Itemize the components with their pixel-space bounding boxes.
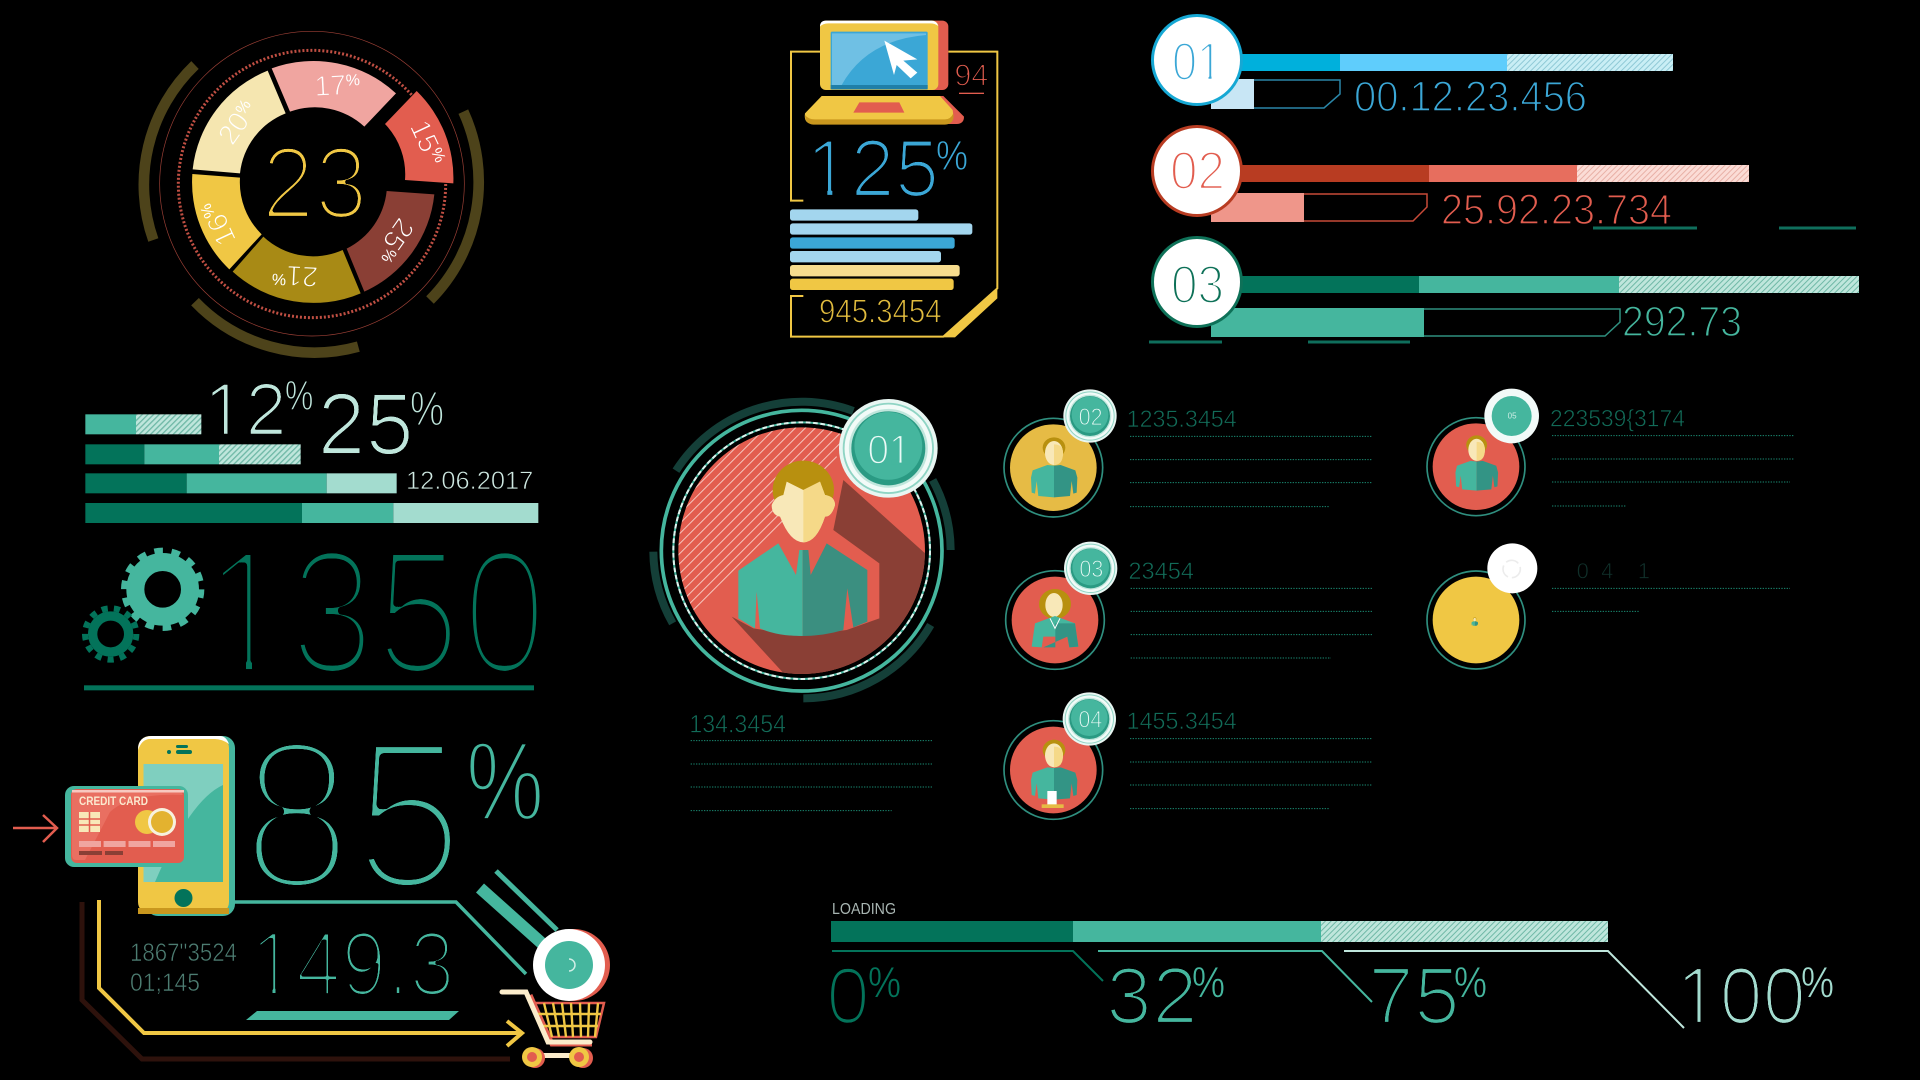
sub bar bbox=[1211, 79, 1340, 109]
panel: main profile bbox=[653, 399, 951, 811]
segment 21%: % bbox=[272, 270, 287, 287]
leader lines bbox=[832, 951, 1684, 1028]
icon: credit card bbox=[65, 786, 188, 867]
badge 01 bbox=[839, 399, 938, 498]
small values: 01;145 bbox=[130, 969, 200, 997]
value 100%: % bbox=[1801, 958, 1834, 1007]
value 12%: % bbox=[285, 372, 313, 419]
panel: profile list column one bbox=[1004, 389, 1373, 819]
value 23454: 23454 bbox=[1128, 558, 1194, 585]
segment 20% bbox=[193, 71, 286, 173]
number badge bbox=[1152, 126, 1242, 216]
segment 17% bbox=[272, 61, 396, 127]
value 0% bbox=[826, 951, 901, 1040]
number badge: 03 bbox=[1171, 255, 1224, 315]
sub bar bbox=[1211, 193, 1427, 222]
label: LOADING bbox=[832, 901, 896, 918]
panel: row 02 bbox=[1152, 126, 1749, 234]
value 85%: 85 bbox=[241, 696, 465, 933]
value: 25.92.23.734 bbox=[1441, 186, 1672, 234]
value 1235.3454: 1235.3454 bbox=[1127, 406, 1237, 433]
value 25%: % bbox=[410, 382, 444, 436]
profile 03 bbox=[1006, 542, 1117, 669]
profile 05: 05 bbox=[1508, 412, 1517, 421]
panel: laptop card bbox=[790, 21, 997, 337]
profile 03: 03 bbox=[1079, 556, 1103, 583]
stripes bbox=[678, 427, 840, 610]
decorative rings bbox=[653, 402, 951, 698]
stacked bars bbox=[85, 414, 538, 523]
icon: loading coin bbox=[533, 929, 610, 1001]
avatar disc bbox=[678, 427, 925, 674]
profile 06 bbox=[1427, 543, 1537, 669]
value 0%: % bbox=[868, 958, 901, 1007]
panel: stacked bars and gears bbox=[84, 369, 548, 711]
profile 04 bbox=[1004, 692, 1116, 819]
small values: 1867"3524 bbox=[130, 939, 237, 967]
connector lines bbox=[235, 871, 557, 974]
profile 02 bbox=[1004, 389, 1117, 517]
value 32%: % bbox=[1192, 958, 1225, 1007]
underbar bbox=[246, 1011, 459, 1020]
faded value: 0 4 1 bbox=[1577, 558, 1650, 583]
value 125%: % bbox=[936, 132, 968, 179]
card frame bbox=[791, 52, 997, 337]
icon: credit card: CREDIT CARD bbox=[79, 794, 148, 808]
value 12%: 12 bbox=[204, 369, 287, 451]
value 134.3454: 134.3454 bbox=[689, 710, 786, 738]
segment 25%: 25 bbox=[376, 212, 420, 256]
progress bar bbox=[831, 921, 1608, 942]
value 100%: 100 bbox=[1676, 951, 1806, 1040]
segment 16% bbox=[192, 174, 262, 269]
segment 20%: 20 bbox=[212, 107, 256, 151]
badge 01: 01 bbox=[867, 426, 911, 472]
segment 15%: 15 bbox=[403, 115, 445, 158]
icon: laptop bbox=[805, 21, 964, 125]
segment 20%: % bbox=[233, 97, 255, 118]
arrow bbox=[13, 815, 57, 842]
number badge: 02 bbox=[1170, 141, 1225, 201]
progress bar bbox=[1240, 165, 1749, 182]
value 1455.3454: 1455.3454 bbox=[1127, 708, 1237, 735]
progress bar bbox=[1240, 276, 1859, 293]
sub bar bbox=[1211, 308, 1620, 337]
small values bbox=[130, 939, 237, 997]
value 1350: 1350 bbox=[203, 513, 548, 711]
number badge bbox=[1152, 238, 1242, 326]
number badge: 01 bbox=[1172, 32, 1222, 92]
segment 21% bbox=[233, 237, 361, 303]
value 32%: 32 bbox=[1106, 951, 1198, 1040]
long shadow bbox=[732, 480, 940, 677]
profile 02: 02 bbox=[1079, 404, 1103, 431]
profile 04: 04 bbox=[1078, 707, 1102, 734]
number badge bbox=[1152, 16, 1242, 104]
value 223539{3174: 223539{3174 bbox=[1550, 406, 1685, 433]
segment 17%: 17 bbox=[314, 69, 347, 103]
icon: smartphone bbox=[138, 736, 235, 916]
value 25%: 25 bbox=[317, 376, 414, 473]
segment 15% bbox=[385, 91, 453, 183]
value: 00.12.23.456 bbox=[1354, 73, 1587, 121]
value 75%: % bbox=[1454, 958, 1487, 1007]
underline bbox=[84, 685, 534, 690]
panel: donut chart bbox=[144, 31, 479, 353]
panel: payment flow bbox=[13, 696, 610, 1068]
centre number: 23 bbox=[261, 126, 368, 240]
value 125%: 125 bbox=[806, 124, 939, 214]
value 149.3: 149.3 bbox=[250, 914, 455, 1015]
outer olive arcs bbox=[144, 65, 479, 353]
value 94: 94 bbox=[954, 59, 988, 93]
icon: small gear bbox=[85, 608, 136, 660]
segment 25%: % bbox=[377, 244, 399, 266]
segment 21%: 21 bbox=[286, 259, 319, 292]
value 85%: % bbox=[466, 719, 544, 844]
icon: shopping cart bbox=[502, 992, 604, 1068]
panel: loading bar bbox=[826, 901, 1834, 1040]
value 0%: 0 bbox=[826, 951, 870, 1040]
profile 05 bbox=[1427, 389, 1539, 516]
value: 292.73 bbox=[1622, 298, 1742, 346]
segment 15%: % bbox=[427, 145, 448, 165]
progress bar bbox=[1240, 54, 1673, 71]
segment 16%: 16 bbox=[201, 208, 243, 251]
segment 17%: % bbox=[345, 72, 360, 90]
person bbox=[738, 461, 867, 636]
value 945.3454: 945.3454 bbox=[819, 293, 942, 330]
icon: yellow flow arrow bbox=[99, 900, 522, 1046]
segment 25% bbox=[347, 191, 434, 292]
segment 16%: % bbox=[198, 201, 219, 221]
panel: row 03 bbox=[1152, 238, 1859, 346]
value 75%: 75 bbox=[1368, 951, 1460, 1040]
icon: dark flow line bbox=[82, 902, 510, 1059]
panel: row 01 bbox=[1152, 16, 1673, 121]
date: 12.06.2017 bbox=[406, 467, 533, 495]
thin and dotted rings bbox=[160, 31, 464, 336]
bar chart bbox=[790, 209, 972, 290]
panel: profile list column two bbox=[1427, 389, 1794, 669]
icon: large gear bbox=[125, 552, 200, 627]
